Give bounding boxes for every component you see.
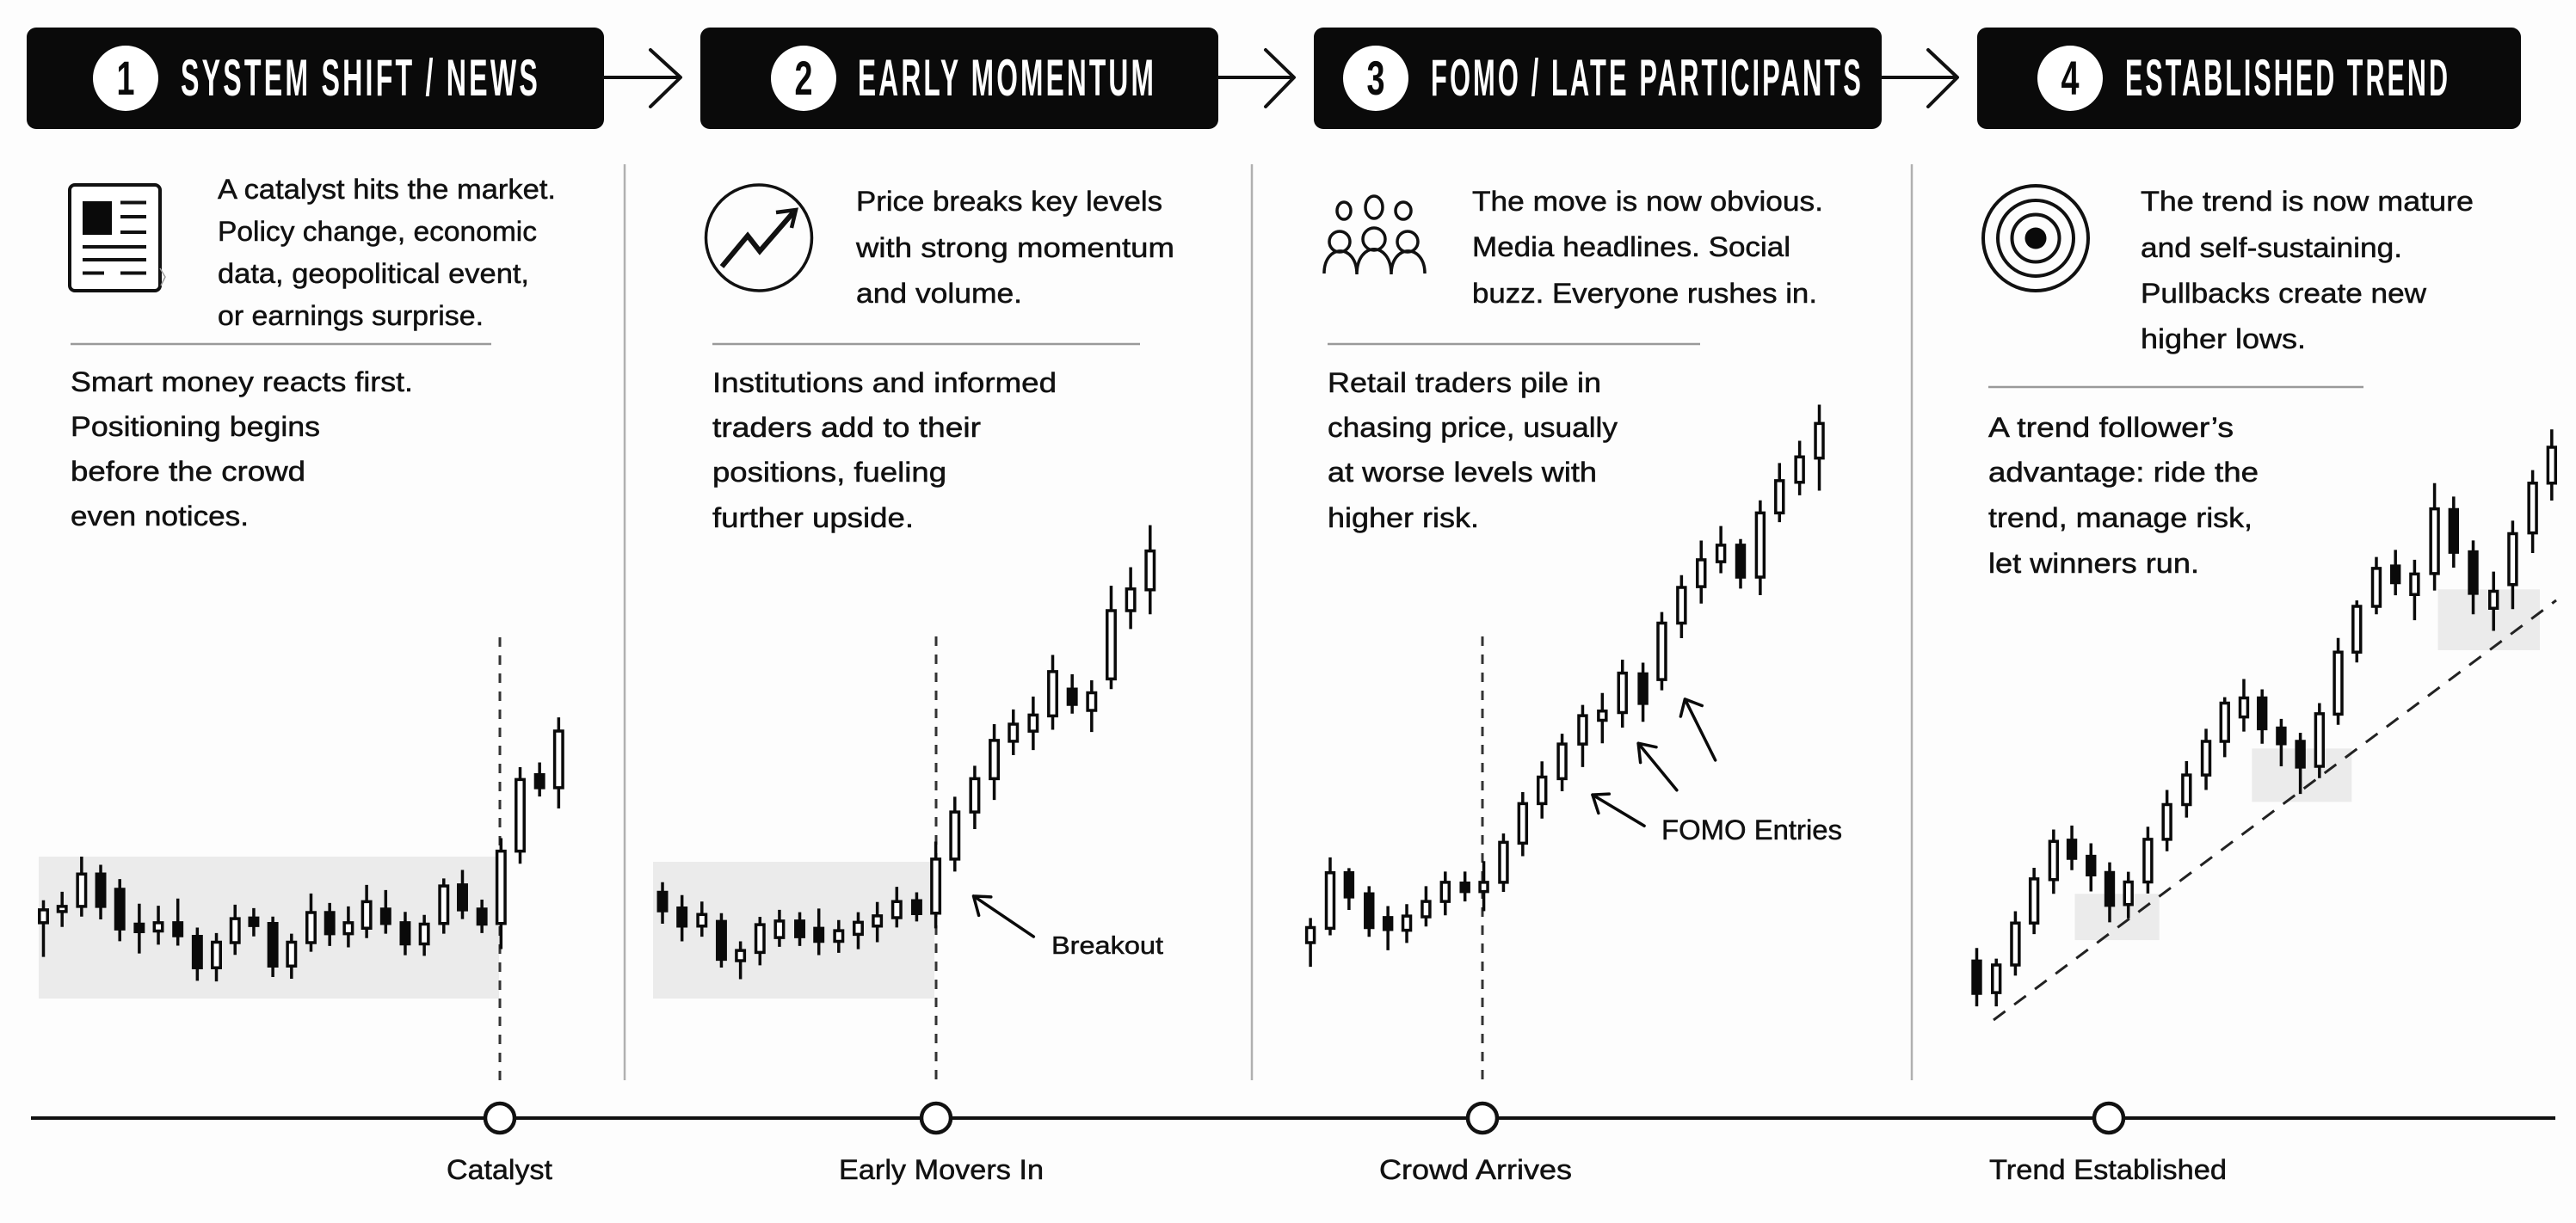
arrow: step 2 to step 3 — [1218, 50, 1294, 107]
text: the move is obvious: The move is now obvious. — [1472, 186, 1823, 217]
header: step 4 established trend: 4 — [2061, 51, 2079, 105]
text: smart money: Positioning begins — [71, 411, 320, 442]
icon: crowd of people — [1324, 196, 1425, 274]
text: price breaks key levels: Price breaks key levels — [856, 186, 1162, 217]
text: price breaks key levels: and volume. — [856, 278, 1022, 309]
header: step 2 early momentum: EARLY MOMENTUM — [858, 49, 1156, 107]
chart: fomo candlesticks — [1307, 405, 1842, 1081]
timeline marker: catalyst — [447, 1103, 552, 1185]
text: institutions: Institutions and informed — [712, 367, 1057, 398]
icon: rising chart in circle — [706, 185, 812, 291]
text: price breaks key levels — [855, 186, 1174, 309]
panel: step 3 content — [1307, 186, 1842, 1081]
icon: target — [1983, 186, 2088, 291]
text: trend follower's advantage: advantage: ride the — [1988, 457, 2259, 488]
label: fomo entries: FOMO Entries — [1661, 814, 1842, 845]
timeline marker: early movers in: Early Movers In — [839, 1154, 1044, 1185]
text: retail traders: Retail traders pile in — [1328, 367, 1601, 398]
text: trend follower's advantage: A trend follower’s — [1988, 412, 2234, 443]
chart: catalyst candlesticks — [39, 637, 563, 1080]
text: trend follower's advantage: trend, manage risk, — [1988, 502, 2252, 533]
header: step 2 early momentum — [700, 28, 1218, 129]
text: institutions — [712, 367, 1057, 533]
text: institutions: positions, fueling — [712, 457, 946, 488]
text: catalyst description: Policy change, economic — [218, 216, 537, 247]
text: catalyst description: A catalyst hits the market. — [218, 174, 556, 205]
text: retail traders: at worse levels with — [1328, 457, 1597, 488]
timeline marker: early movers in — [839, 1103, 1044, 1185]
text: institutions: traders add to their — [712, 412, 981, 443]
text: retail traders: chasing price, usually — [1328, 412, 1618, 443]
label: breakout: Breakout — [1051, 932, 1163, 960]
panel: step 2 content — [653, 185, 1174, 1081]
header: step 1 system shift / news — [27, 28, 604, 129]
text: smart money — [71, 366, 413, 532]
header: step 4 established trend — [1977, 28, 2521, 129]
text: trend follower's advantage — [1988, 412, 2259, 579]
text: the trend is mature: Pullbacks create new — [2141, 278, 2427, 309]
text: price breaks key levels: with strong momentum — [855, 232, 1174, 263]
arrow: breakout pointer — [973, 896, 1033, 937]
header: step 3 fomo / late participants — [1314, 28, 1882, 129]
text: retail traders — [1328, 367, 1618, 533]
header: step 2 early momentum: 2 — [795, 51, 812, 105]
text: smart money: before the crowd — [71, 456, 305, 487]
timeline marker: catalyst: Catalyst — [447, 1154, 552, 1185]
text: the move is obvious — [1472, 186, 1823, 309]
text: trend follower's advantage: let winners run. — [1988, 548, 2199, 579]
timeline marker: crowd arrives — [1379, 1103, 1572, 1185]
text: the trend is mature: The trend is now mature — [2141, 186, 2474, 217]
arrow: step 1 to step 2 — [604, 50, 681, 107]
text: the move is obvious: Media headlines. Social — [1472, 231, 1790, 262]
arrow: step 3 to step 4 — [1882, 50, 1957, 107]
icon: newspaper — [70, 185, 165, 291]
header: step 1 system shift / news: SYSTEM SHIFT / NEWS — [181, 49, 540, 107]
text: the trend is mature: higher lows. — [2141, 323, 2306, 354]
text: catalyst description — [218, 174, 556, 331]
trendline: dashed support — [1994, 600, 2556, 1020]
text: retail traders: higher risk. — [1328, 502, 1479, 533]
text: smart money: even notices. — [71, 501, 249, 532]
panel: step 1 content — [39, 174, 563, 1080]
header: step 3 fomo / late participants: 3 — [1366, 51, 1385, 105]
text: catalyst description: data, geopolitical event, — [218, 258, 529, 289]
text: smart money: Smart money reacts first. — [71, 366, 413, 397]
timeline marker: trend established — [1989, 1103, 2227, 1185]
text: the trend is mature — [2141, 186, 2474, 354]
text: the move is obvious: buzz. Everyone rushes in. — [1472, 278, 1817, 309]
timeline — [31, 1103, 2555, 1185]
timeline marker: crowd arrives: Crowd Arrives — [1379, 1154, 1572, 1185]
chart: breakout candlesticks — [653, 525, 1163, 1081]
text: catalyst description: or earnings surprise. — [218, 300, 484, 331]
header: step 1 system shift / news: 1 — [117, 51, 134, 105]
panel: step 4 content — [1973, 186, 2556, 1020]
text: the trend is mature: and self-sustaining. — [2141, 232, 2402, 263]
text: institutions: further upside. — [712, 502, 914, 533]
arrows: fomo entry pointers — [1593, 699, 1716, 826]
timeline marker: trend established: Trend Established — [1989, 1154, 2227, 1185]
header: step 3 fomo / late participants: FOMO / LATE PARTICIPANTS — [1431, 49, 1864, 107]
chart: established trend candlesticks — [1973, 429, 2556, 1020]
